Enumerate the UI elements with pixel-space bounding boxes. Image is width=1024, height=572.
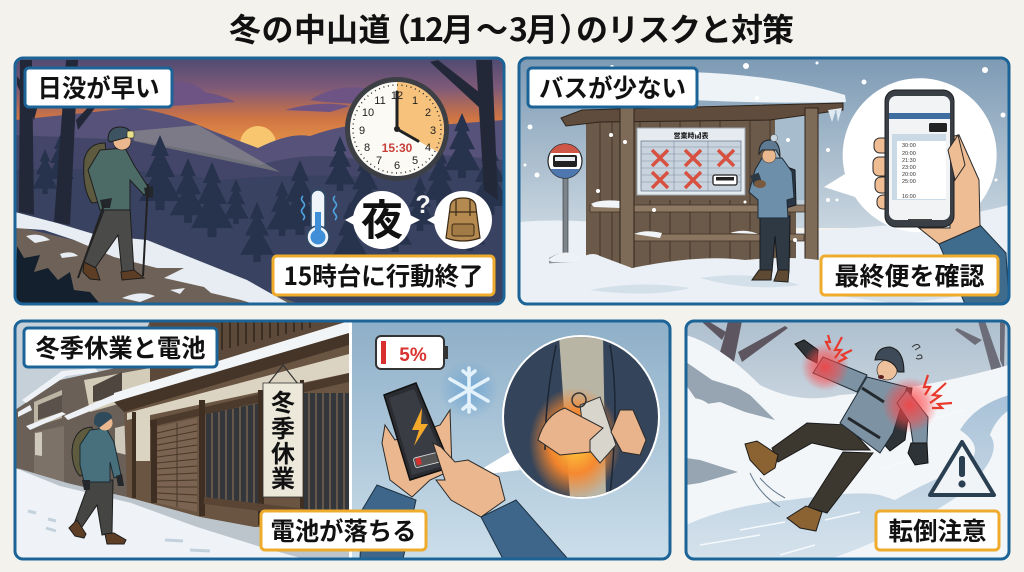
roof snow: far houses [18,368,118,430]
lower street facade [34,426,64,482]
left sleeve [360,485,416,559]
snow slope [686,335,1009,559]
panel 1 frame [15,58,504,304]
clock numerals: 10 [362,107,374,119]
knit cap [759,140,780,157]
eaves [114,331,349,412]
road [17,468,349,559]
timetable rows: 30:00 [902,143,916,149]
sky [686,321,1009,559]
night bubble [345,187,420,249]
day pack [782,165,796,208]
plaster panel [136,415,150,461]
roof snow [690,72,846,103]
right hand [611,410,646,455]
icicles [828,108,842,122]
boots [752,270,789,282]
timetable rows: 20:00 [902,151,916,157]
lightning bolt [412,408,428,446]
clock numerals: 6 [394,160,400,172]
gloved hands [754,180,766,188]
timetable board: 営業時間表 [674,131,708,141]
clock numerals: 8 [364,142,370,154]
power bank [580,397,616,463]
open mouth [878,375,884,379]
far house windows [38,395,62,420]
rocks [686,362,775,485]
pack straps and pocket [450,200,476,216]
snow bank [15,212,290,304]
snowflakes [524,62,1006,242]
snow drifts [590,275,960,304]
timetable rows: 16:00 [902,194,916,200]
timetable rows: 25:00 [902,179,916,185]
label: few buses: バスが少ない [539,69,686,105]
far houses [15,321,349,500]
traveler at shelter [749,134,796,282]
lattice window [206,403,260,508]
face [112,138,132,150]
boots [83,262,144,280]
panel 2 frame [519,58,1009,304]
panel: winter closures and battery [15,321,671,559]
main snow roof [114,321,349,402]
night bubble: 夜 [361,187,403,248]
right scene background [352,321,671,559]
face [877,360,897,380]
jacket [80,428,121,482]
dizzy marks [912,344,922,359]
roof [561,103,843,126]
bare tree left [702,321,788,382]
upper house windows [93,372,122,402]
sky through right opening [775,110,805,200]
sky at sunset [16,60,502,142]
snowflake glow [439,360,499,420]
left hand [538,408,603,455]
falling hiker [745,340,928,531]
backpack [880,387,912,451]
question mark: ? [415,191,431,219]
snow patches [26,235,185,302]
panel: early sunset [15,58,511,304]
inset: warming power bank [500,330,662,505]
knit hat [108,127,132,142]
snow drift at shelter foot [519,254,1009,304]
backpack [83,142,106,204]
right lattice [303,393,349,518]
far house plaster [34,390,62,427]
wall rail [590,205,805,212]
panel 4 frame [686,321,1009,559]
battery indicator [376,336,448,369]
clock numerals: 9 [359,125,365,137]
low charge bar [413,452,441,468]
shop sign: winter closure [263,365,303,497]
cross beam [150,373,349,427]
raised leg [772,423,870,462]
tilted phone [384,383,451,480]
footprints and drift shadows [28,511,210,551]
timetable rows: 20:00 [902,172,916,178]
clock numerals: 12 [391,90,403,102]
bus stop sign [547,143,583,179]
panel 3 frame [15,321,670,559]
snowflake icon [450,368,488,412]
right lattice bars [309,393,344,518]
boots [69,520,126,544]
shutter slats [157,423,197,507]
clock numerals: 11 [374,95,386,107]
knit cap [875,347,904,372]
jacket [749,158,794,218]
headlamp [127,131,134,138]
callout: finish by 15:00s: 15時台に行動終了 [284,257,484,293]
afternoon wedge [397,82,444,152]
timetable rows [902,143,916,200]
clock numerals: 5 [412,155,418,167]
warning triangle [930,442,994,495]
warm glow [529,387,621,499]
ice stream [686,395,1009,559]
label: closures and battery: 冬季休業と電池 [36,329,206,365]
pale sky [15,321,349,559]
clock numerals: 1 [412,95,418,107]
snow on rocks [686,398,718,458]
shop sign: winter closure: 業 [271,459,295,494]
bus stop pole [563,178,568,253]
raised glove [795,340,818,363]
bare tree right [955,321,1005,380]
callout: slip caution: 転倒注意 [888,512,986,548]
upper house plaster [84,368,150,412]
raised boot [745,441,778,475]
posts [620,108,818,268]
ice scratches [700,410,965,555]
backpack [72,427,97,476]
winter sky [519,58,1009,228]
jacket [500,330,662,505]
backpack bubble [427,191,492,249]
clock [345,77,449,181]
pole base [549,253,572,264]
upper storey with lattice [150,321,349,392]
wall planks [600,112,790,270]
trousers [84,208,134,272]
cord loop [572,393,586,407]
holding hand [382,410,452,497]
trousers [760,216,790,272]
bare trunks [17,60,498,225]
hand holding phone [919,135,980,244]
clock numerals: 2 [425,107,431,119]
inner sweater [559,336,606,498]
gloves [82,474,124,490]
snow on bench and rail [591,200,758,238]
white divider [349,321,352,559]
pine forest [32,113,511,262]
callout: battery drains: 電池が落ちる [270,512,416,548]
lattice bars [212,404,254,507]
clock numerals: 4 [425,142,431,154]
planted boot [787,506,822,531]
smartphone [885,90,954,227]
timetable rows: 23:00 [902,165,916,171]
battery indicator: 5% [399,345,427,366]
wrist pain glow [801,343,849,391]
rear leg [808,452,873,513]
upper lattice bars [222,321,310,350]
pointing hand [433,443,505,517]
forest ridge [15,169,504,304]
panel: slip caution [686,321,1009,559]
lowered arm [897,390,928,443]
title: 冬の中山道（12月〜3月）のリスクと対策 [229,5,794,51]
shop sign: winter closure: 季 [271,409,295,444]
face [762,149,776,163]
panel: few buses [519,58,1009,304]
phone bubble [824,78,997,232]
trail ground [15,226,300,304]
dark shrub [15,246,100,304]
main facade [124,340,349,530]
trekking poles [78,184,148,278]
pole base snow [548,252,582,262]
clock numerals: 7 [376,155,382,167]
remaining bus icon [713,175,737,185]
lower plaster and pale window [35,425,127,456]
jacket [88,148,150,210]
snow ground [520,206,1008,268]
far mountains [16,108,502,165]
walking hiker [69,412,126,544]
knit cap [94,412,112,428]
sliding shutters [157,418,197,512]
hiker with headlamp [78,127,153,280]
slide marks [750,473,785,507]
fingers [873,138,890,209]
shop sign: winter closure: 休 [271,434,295,469]
timetable rows: 21:30 [902,158,916,164]
timetable board [637,128,745,195]
left street scene [15,321,349,559]
pompom [770,134,778,142]
label: sunset: 日没が早い [38,69,160,105]
face [98,416,112,430]
chest straps [848,388,884,438]
shelter back wall [586,112,796,270]
posts [132,380,304,526]
clouds [172,81,365,112]
sun [240,126,276,148]
crossed-out times [652,150,734,188]
thumb [948,135,965,180]
phone screen [389,389,446,475]
gloves [100,186,153,208]
torso [840,377,907,453]
thermometer [302,190,336,248]
clock numerals: 3 [430,125,436,137]
trousers [74,480,113,535]
snow ground [15,468,304,559]
shoulder pain glow [882,377,938,433]
lowered glove [908,443,928,465]
mid mountains [16,135,502,180]
shop sign: winter closure: 冬 [271,383,295,418]
phone in hand [750,173,762,186]
inset tail [470,452,520,476]
headlamp beam [133,125,280,172]
time readout: 15:30 [382,141,413,155]
pain bolts [826,335,952,408]
callout: check last bus: 最終便を確認 [834,257,984,293]
phone and hands [360,383,568,559]
raised arm [813,357,867,392]
right sleeve [481,500,568,559]
sleeve [939,225,1009,304]
clock numerals [359,90,436,172]
plaster band [127,354,349,420]
clock hands [397,92,418,141]
jacket edges [545,345,615,495]
bench [634,234,804,241]
sill beam [204,497,349,522]
